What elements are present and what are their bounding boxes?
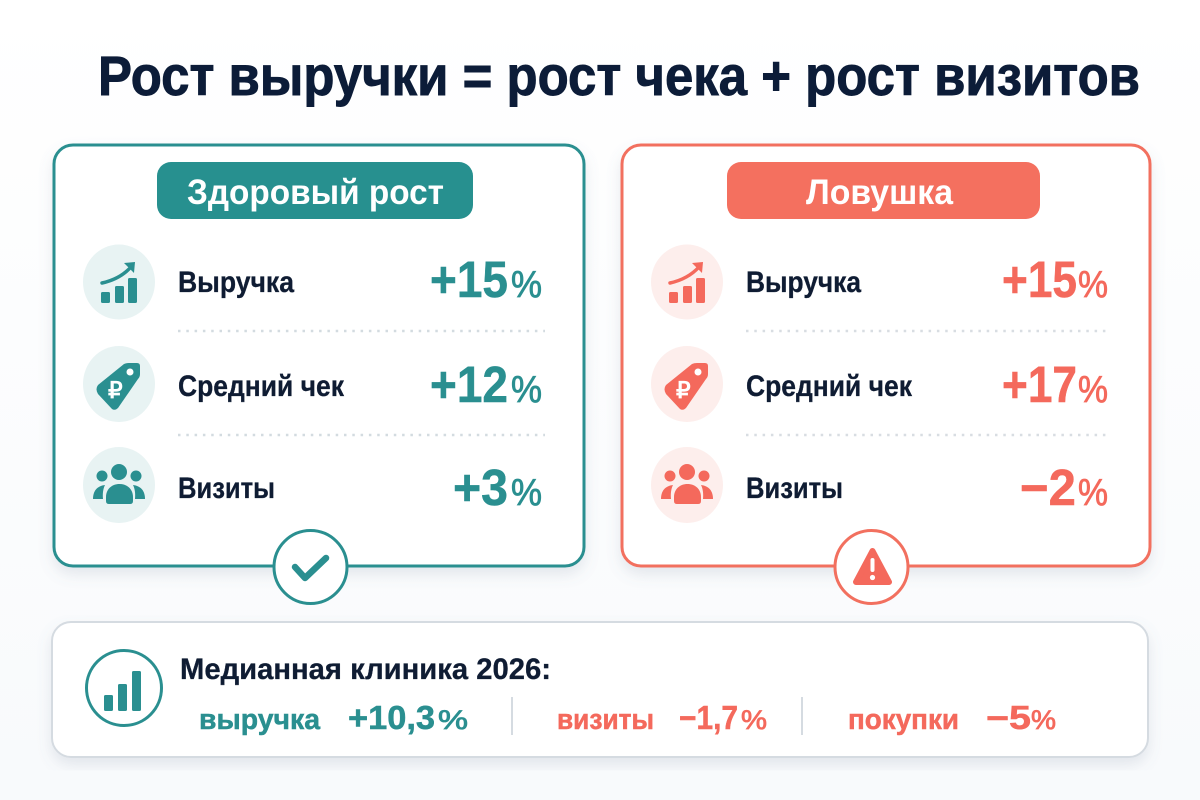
icon: bar chart [86, 650, 162, 726]
label: average check: Средний чек [746, 370, 913, 403]
metric: visits: визиты [557, 704, 654, 736]
metric: revenue: +10,3 [348, 699, 435, 736]
icon: price tag [83, 346, 155, 422]
value: +15%: % [511, 264, 542, 306]
value: +15%: % [1078, 264, 1108, 306]
value: −2%: −2 [1020, 459, 1076, 516]
icon: warning badge [835, 530, 908, 604]
metric: purchases: покупки [848, 704, 959, 736]
value: +17%: +17 [1002, 356, 1077, 413]
label: revenue: Выручка [746, 266, 861, 299]
panel: trap [622, 145, 1150, 604]
icon: people [83, 447, 155, 523]
value: +12%: +12 [430, 356, 508, 413]
metric: visits: % [741, 705, 767, 735]
badge: trap: Ловушка [806, 173, 954, 212]
icon: revenue chart [651, 244, 723, 320]
icon: revenue chart [83, 244, 155, 320]
value: +15%: +15 [1002, 251, 1077, 308]
row: revenue [651, 244, 1108, 320]
value: +12%: % [511, 369, 542, 411]
row: revenue [83, 244, 542, 320]
value: −2% [1020, 459, 1108, 516]
metric: purchases: % [1031, 705, 1056, 735]
icon: price tag: ₽ [108, 377, 123, 403]
metric: revenue: выручка [199, 704, 321, 736]
value: +15%: +15 [430, 251, 508, 308]
icon: check badge [274, 530, 347, 604]
metric: revenue: % [438, 705, 468, 735]
badge: trap [727, 162, 1040, 219]
badge: healthy growth: Здоровый рост [187, 173, 444, 212]
row: average check [651, 346, 1108, 422]
panel: median clinic [52, 622, 1148, 757]
metric: purchases: −5 [986, 699, 1031, 736]
panel: healthy growth [54, 145, 584, 604]
metric: visits: −1,7 [679, 699, 738, 736]
row: average check [83, 346, 542, 422]
metric: visits [557, 699, 767, 736]
value: +3% [453, 459, 542, 516]
label: visits: Визиты [178, 472, 275, 505]
value: +3%: % [511, 472, 542, 514]
value: +17%: % [1078, 369, 1108, 411]
label: revenue: Выручка [178, 266, 294, 299]
value: +3%: +3 [453, 459, 508, 516]
badge: healthy growth [157, 162, 473, 219]
heading: median clinic: Медианная клиника 2026: [180, 653, 551, 686]
value: −2%: % [1078, 472, 1108, 514]
metric: revenue [199, 699, 468, 736]
label: visits: Визиты [746, 472, 843, 505]
metric: purchases [848, 699, 1056, 736]
label: average check: Средний чек [178, 370, 345, 403]
icon: price tag [651, 346, 723, 422]
row: visits [651, 447, 1108, 523]
row: visits [83, 447, 542, 523]
icon: people [651, 447, 723, 523]
icon: price tag: ₽ [676, 377, 691, 403]
